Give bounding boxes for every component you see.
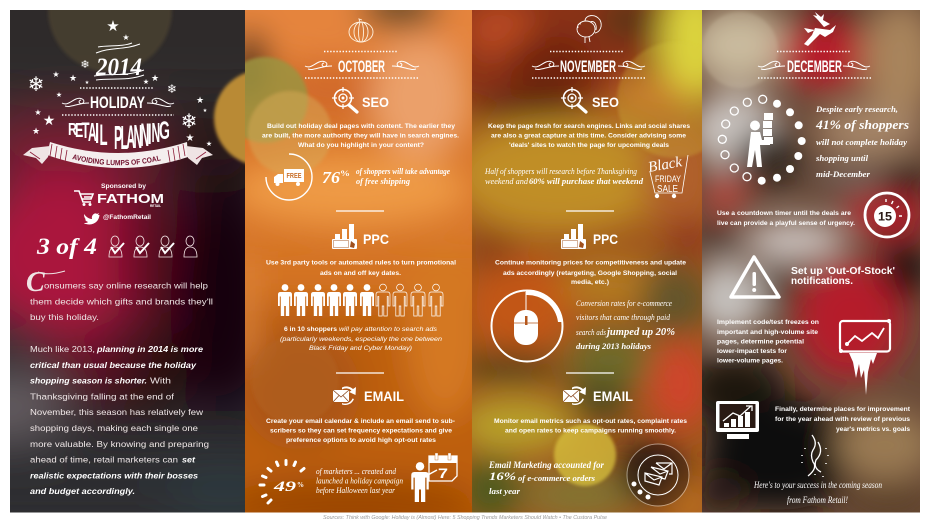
section: PPC: Continue monitoring prices for competitiveness and update xyxy=(495,260,686,266)
closing message xyxy=(753,435,882,505)
stat: 76% free shipping: % xyxy=(340,169,350,178)
stat: Thanksgiving research xyxy=(484,154,688,198)
tip: countdown timer xyxy=(717,193,909,237)
icon: envelopes in circles xyxy=(627,444,689,506)
tip: year ahead review: year's metrics vs. goals xyxy=(836,426,910,433)
icon: stars and snowflakes: ❄ xyxy=(167,82,177,96)
stat: 76% free shipping: 76 xyxy=(322,168,341,187)
section: Email: preference options to avoid high opt-out rates xyxy=(286,437,436,444)
stat: 49% of marketers: % xyxy=(297,481,304,489)
heading: Retail Planning: A xyxy=(126,120,135,156)
closing message: from Fathom Retail! xyxy=(787,495,848,505)
tip: code freezes: important and high-volume site xyxy=(717,329,818,336)
text block: introduction: and budget accordingly. xyxy=(30,486,135,496)
tip: out-of-stock notifications xyxy=(731,257,895,297)
tip: year ahead review: Finally, determine places for improvement xyxy=(775,406,911,413)
icon: mouse in ring xyxy=(492,290,563,362)
heading: Retail Planning: E xyxy=(75,119,83,142)
panel: intro xyxy=(10,10,245,512)
heading: October: OCTOBER xyxy=(338,57,385,76)
icon: PPC chart xyxy=(561,224,586,249)
stat: conversion rates: Conversion rates for e-commerce xyxy=(576,299,672,308)
ribbon: Avoiding Lumps of Coal xyxy=(23,142,213,168)
tip: code freezes: pages, determine potential xyxy=(717,338,804,346)
icon: stars and snowflakes: ★ xyxy=(196,96,204,106)
icon: stars and snowflakes: ★ xyxy=(85,80,90,86)
text: search ad attention xyxy=(280,326,442,352)
icon: stars and snowflakes: ★ xyxy=(32,127,40,137)
section: PPC xyxy=(266,224,456,277)
tip: code freezes xyxy=(717,319,891,395)
tip: out-of-stock notifications: Set up 'Out-Of-Stock' xyxy=(791,265,895,277)
icon: free shipping truck in ring xyxy=(266,154,312,200)
tip: code freezes: lower-impact tests for xyxy=(717,348,787,355)
closing message: Here's to your success in the coming season xyxy=(753,480,882,490)
stat: 76% free shipping xyxy=(266,154,450,200)
section: PPC: PPC xyxy=(593,231,618,247)
icon: reindeer xyxy=(804,12,836,46)
heading: Retail Planning: A xyxy=(88,119,97,147)
icon: timer 15 xyxy=(865,193,909,237)
heading: Retail Planning: L xyxy=(100,118,108,151)
text block: introduction: set xyxy=(182,455,196,465)
stat: Thanksgiving research: weekend and xyxy=(485,177,529,186)
icon: stars and snowflakes: ★ xyxy=(43,113,55,129)
icon: 6 of 10 shoppers xyxy=(278,284,443,316)
text block: introduction: Much like 2013, xyxy=(30,344,95,354)
stat: 16% of orders: Email Marketing accounted for xyxy=(488,460,604,470)
icon: shopping cart xyxy=(74,191,93,202)
ribbon: Avoiding Lumps of Coal: AVOIDING LUMPS OF COAL xyxy=(72,154,161,166)
panel: October xyxy=(245,10,472,512)
text block: introduction: shopping days, making each single one xyxy=(30,423,198,433)
section: Email xyxy=(494,386,687,434)
text block: introduction: planning in 2014 is more xyxy=(96,344,203,354)
icon: countdown dots with person carrying boxes xyxy=(718,95,806,185)
heading: Retail Planning: G xyxy=(159,118,170,145)
stat: Thanksgiving research: Half of shoppers will research before Thanksgiving xyxy=(484,167,637,176)
stat: conversion rates: during 2013 holidays xyxy=(576,342,651,351)
text block: introduction: shopping season is shorter. xyxy=(30,376,147,386)
icon: Black Friday sale cart: Black xyxy=(647,154,684,176)
section: PPC: PPC xyxy=(363,231,389,247)
heading: Retail Planning: T xyxy=(82,119,90,143)
icon: search target xyxy=(561,87,586,112)
icon: pumpkin xyxy=(349,19,373,42)
sponsor: Fathom Retail: RETAIL xyxy=(150,204,162,208)
title lockup: 2014 Holiday Retail Planning xyxy=(23,17,213,168)
text block: introduction: ahead of time, retail marketers can xyxy=(30,455,178,465)
section: SEO xyxy=(488,87,690,149)
section: PPC: media, etc.) xyxy=(571,279,609,286)
section: SEO: What do you highlight in your content? xyxy=(298,142,424,149)
heading: Retail Planning: L xyxy=(120,120,128,157)
icon: stars and snowflakes: ❄ xyxy=(28,72,44,96)
stat: 49% of marketers: launched a holiday campaign xyxy=(316,476,403,486)
icon: stars and snowflakes: ★ xyxy=(186,133,195,144)
section: SEO: are built, the more authority they will have in search engines. xyxy=(262,132,459,140)
heading: November: NOVEMBER xyxy=(560,57,616,76)
icon: man and calendar xyxy=(411,453,457,502)
text block: introduction: November, this season has relatively few xyxy=(30,407,204,417)
sponsor: Fathom Retail: @FathomRetail xyxy=(103,214,151,221)
icon: monitor with growth chart xyxy=(716,401,759,439)
tip: year ahead review xyxy=(716,401,911,439)
section: SEO xyxy=(262,87,459,149)
panel: November xyxy=(440,0,740,523)
icon: stars and snowflakes: ★ xyxy=(151,74,159,84)
stat: conversion rates: visitors that came through paid xyxy=(576,313,671,322)
icon: people with check marks xyxy=(109,236,197,257)
tip: code freezes: lower-volume pages. xyxy=(717,358,783,364)
icon: champagne toast xyxy=(802,435,828,477)
panel: December xyxy=(685,0,930,516)
icon: man and calendar: 7 xyxy=(438,465,448,481)
year 2014: 2014 xyxy=(95,54,142,81)
tip: year ahead review: for the year ahead with review of previous xyxy=(775,416,910,423)
section: SEO: SEO xyxy=(592,94,619,110)
stat: 16% of orders xyxy=(488,444,689,506)
section: PPC: ads accordingly (retargeting, Google Shopping, social xyxy=(503,270,677,277)
icon: Black Friday sale cart xyxy=(647,154,688,198)
panel background: Santa xyxy=(702,10,920,512)
heading: December: DECEMBER xyxy=(787,57,842,76)
section: SEO: are also a great capture at this time. Consider advising some xyxy=(491,132,686,140)
section: Email: Monitor email metrics such as opt-out rates, complaint rates xyxy=(494,418,687,425)
text block: introduction: buy this holiday. xyxy=(30,312,99,322)
sponsor: Fathom Retail: Sponsored by xyxy=(101,183,146,190)
swirl right xyxy=(147,98,174,106)
icon: free shipping truck in ring: FREE xyxy=(286,173,302,180)
icon: stars and snowflakes: ★ xyxy=(122,33,130,42)
icon: twitter bird xyxy=(84,213,100,224)
icon: search target xyxy=(332,87,357,112)
sources footnote: Sources: Think with Google: Holiday is (Almost) Here: 5 Shopping Trends Marketers Should Watch • The Custora Pulse xyxy=(323,515,607,521)
heading: Retail Planning: N xyxy=(152,117,160,148)
stat: conversion rates: jumped up 20% xyxy=(605,327,675,338)
icon: stars and snowflakes: ★ xyxy=(206,140,212,148)
stat: 76% free shipping: of free shipping xyxy=(356,177,410,186)
icon: stars and snowflakes: ★ xyxy=(69,74,77,84)
text: search ad attention: 6 in 10 shoppers xyxy=(284,326,337,333)
tip: code freezes: Implement code/test freezes on xyxy=(717,319,819,326)
stat: 49% of marketers xyxy=(260,453,457,503)
tip: out-of-stock notifications: notifications. xyxy=(791,275,853,287)
section: PPC: Use 3rd party tools or automated rules to turn promotional xyxy=(266,260,456,266)
stat: 3 of 4: 3 of 4 xyxy=(36,234,97,259)
tip: countdown timer: live can provide a playful sense of urgency. xyxy=(717,220,855,227)
text block: introduction: critical than usual because the holiday xyxy=(30,360,197,370)
icon: email xyxy=(333,386,356,405)
stat: 16% of orders: 16% xyxy=(489,469,516,483)
stat: Thanksgiving research: 60% will purchase that weekend xyxy=(529,177,644,186)
stat: 41% of shoppers xyxy=(718,95,909,185)
panel background: crimson and charcoal bokeh xyxy=(10,10,245,512)
text block: introduction: onsumers say online research will help xyxy=(44,280,208,290)
stat: 76% free shipping: of shoppers will take advantage xyxy=(356,167,450,176)
icon: stars and snowflakes: ★ xyxy=(34,108,42,117)
heading: Retail Planning: P xyxy=(114,120,122,157)
text block: introduction: Thanksgiving falling at the end of xyxy=(30,391,175,401)
text block: introduction: realistic expectations with their bosses xyxy=(30,470,198,480)
section: Email: EMAIL xyxy=(593,388,633,404)
stat: 41% of shoppers: 41% of shoppers xyxy=(815,117,909,132)
text block: introduction: With xyxy=(150,376,171,386)
heading: Retail Planning: I xyxy=(95,117,99,149)
heading: Retail Planning: N xyxy=(134,120,142,156)
icon: turkey xyxy=(577,16,601,43)
stat: conversion rates xyxy=(492,290,675,362)
stat: conversion rates: search ads xyxy=(576,328,606,337)
icon: stars and snowflakes: ❄ xyxy=(80,58,90,71)
text: search ad attention: will pay attention to search ads xyxy=(339,326,438,333)
icon: PPC chart xyxy=(332,224,357,249)
stat: 16% of orders: of e-commerce orders xyxy=(518,474,595,483)
drop cap: C xyxy=(26,267,45,298)
heading: Retail Planning: I xyxy=(148,119,152,152)
text: search ad attention: Black Friday and Cyber Monday) xyxy=(309,345,412,352)
section: Email xyxy=(266,386,455,444)
stat: 41% of shoppers: Despite early research, xyxy=(815,105,898,114)
text block: introduction: them decide which gifts and brands they'll xyxy=(30,296,213,306)
icon: timer 15: 15 xyxy=(878,210,892,224)
icon: stars and snowflakes: ★ xyxy=(52,70,60,79)
heading: Retail Planning: R xyxy=(68,120,77,140)
icon: stars and snowflakes: ★ xyxy=(203,108,208,114)
section: Email: Create your email calendar & include an email send to sub- xyxy=(266,418,455,425)
text block: introduction xyxy=(26,267,213,496)
icon: frozen chart with icicles xyxy=(839,319,891,395)
tip: countdown timer: Use a countdown timer until the deals are xyxy=(717,210,851,217)
section: Email: and open rates to keep campaigns running smoothly. xyxy=(505,428,676,434)
icon: stars and snowflakes xyxy=(28,17,212,148)
panel background: pumpkin xyxy=(245,10,472,512)
stat: 16% of orders: last year xyxy=(489,487,521,496)
heading: Holiday: HOLIDAY xyxy=(90,93,145,112)
icon: stars and snowflakes: ★ xyxy=(143,78,149,86)
sponsor: Fathom Retail: FATHOM xyxy=(97,191,164,206)
heading: October xyxy=(305,52,419,78)
icon: email xyxy=(563,386,586,405)
text block: introduction: more valuable. By knowing and preparing xyxy=(30,439,209,449)
section: SEO: Keep the page fresh for search engines. Links and social shares xyxy=(488,123,690,130)
swirl left xyxy=(62,98,89,106)
stat: 49% of marketers: of marketers ... created and xyxy=(316,467,397,476)
heading: November xyxy=(532,52,645,78)
icon: Black Friday sale cart: SALE xyxy=(657,184,678,195)
heading: Retail Planning: N xyxy=(140,118,149,154)
section: SEO: Build out holiday deal pages with content. The earlier they xyxy=(267,123,455,130)
section: SEO: 'deals' sites to watch the page for upcoming deals xyxy=(509,142,669,149)
stat: 41% of shoppers: shopping until xyxy=(815,154,869,163)
stat: 41% of shoppers: mid-December xyxy=(816,170,871,179)
icon: stars and snowflakes: ❄ xyxy=(181,109,197,133)
panel background: autumn leaves xyxy=(472,10,702,512)
heading: December xyxy=(758,52,871,78)
section: Email: EMAIL xyxy=(364,388,404,404)
section: PPC xyxy=(495,224,686,286)
text: search ad attention: (particularly weekends, especially the one between xyxy=(280,336,442,343)
icon: warning triangle xyxy=(731,257,779,297)
heading: Retail Planning xyxy=(68,117,170,157)
section: Email: scribers so they can set frequency expectations and give xyxy=(270,428,452,434)
stat: 49% of marketers: before Halloween last year xyxy=(316,486,396,495)
stat: 3 of 4 xyxy=(36,234,197,259)
stat: 49% of marketers: 49 xyxy=(273,479,297,495)
stat: 41% of shoppers: will not complete holiday xyxy=(816,138,907,147)
icon: radial dashes xyxy=(260,460,304,503)
section: PPC: ads on and off key dates. xyxy=(320,270,401,277)
section: SEO: SEO xyxy=(362,94,389,110)
icon: Black Friday sale cart: FRIDAY xyxy=(655,174,681,184)
icon: stars and snowflakes: ★ xyxy=(56,91,62,99)
sponsor: Fathom Retail xyxy=(74,183,164,224)
icon: stars and snowflakes: ★ xyxy=(106,17,120,35)
